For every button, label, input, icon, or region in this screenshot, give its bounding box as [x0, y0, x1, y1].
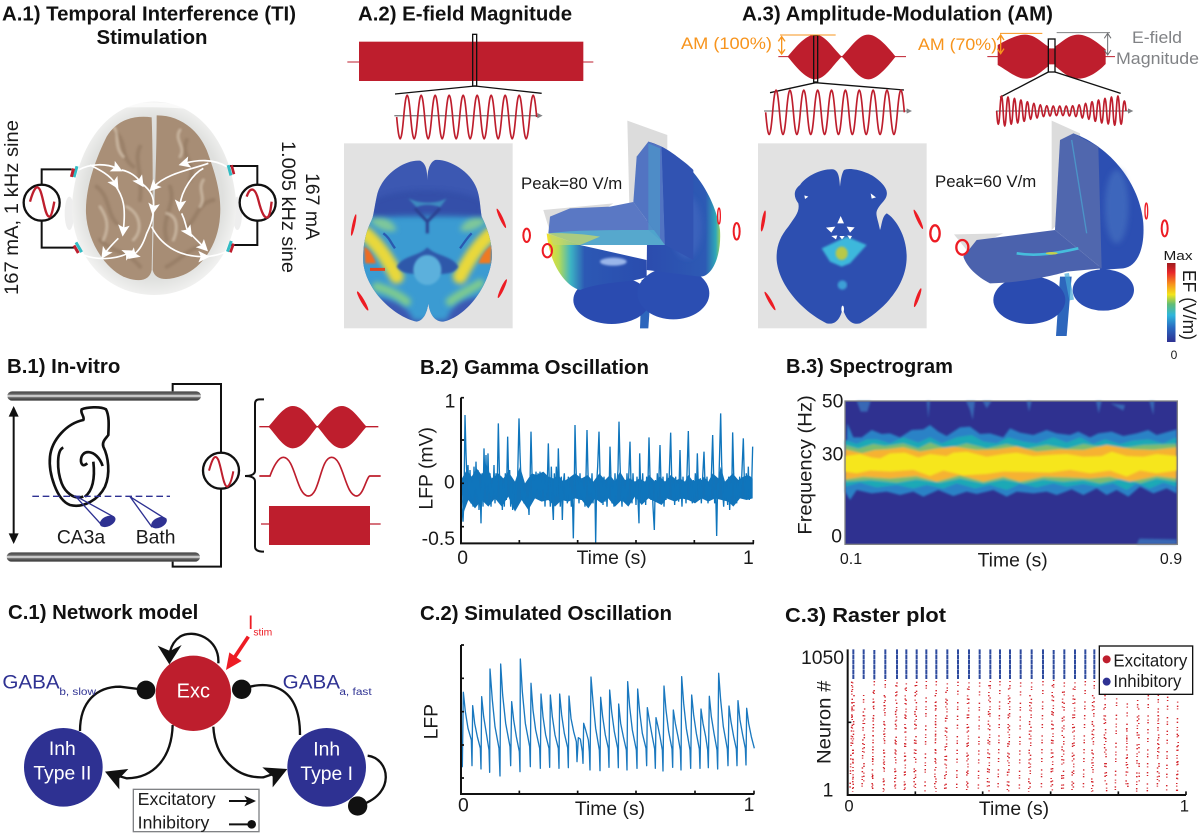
heading: A.2: A.2) E-field Magnitude: [358, 4, 572, 26]
colorbar: 0: [1171, 348, 1178, 362]
axis labels B.3: [796, 391, 1182, 572]
legend: connection types: Inhibitory: [138, 812, 210, 832]
label: I stim: [248, 613, 272, 639]
axis labels B.3: 0.1: [840, 551, 862, 568]
label: GABA a fast: [283, 672, 372, 698]
chart: measured LFP trace: [417, 391, 754, 569]
label: AM 100 percent: AM (100%): [681, 34, 772, 53]
heading: A.3: A.3) Amplitude-Modulation (AM): [742, 4, 1053, 26]
colorbar: [1164, 248, 1199, 362]
label: AM 70 percent: AM (70%): [918, 35, 997, 54]
node: Inh Type II: [24, 728, 103, 807]
labels: CA3a and Bath: Bath: [136, 527, 176, 548]
axis labels C.3: Neuron #: [815, 680, 836, 764]
heading: A.1: Stimulation: [96, 27, 208, 49]
slice: E-field axial map 100 percent carrier: [344, 143, 513, 328]
waveform: AM 100 percent: [764, 35, 912, 135]
3D brain E-field map A.2: [523, 121, 740, 328]
panel: A.1 temporal interference stimulation: [1, 4, 323, 295]
axis labels B.3: Frequency (Hz): [796, 395, 817, 535]
hippocampal slice: [50, 407, 109, 506]
head and brain illustration: [65, 102, 242, 295]
node: Inh Type I: Inh: [313, 740, 340, 761]
label: I stim: I: [248, 613, 253, 634]
panel: B.2 gamma oscillation: [417, 357, 754, 569]
legend: neuron types: Excitatory: [1113, 651, 1188, 671]
axis labels B.3: 0.9: [1160, 551, 1182, 568]
heading: C.2: C.2) Simulated Oscillation: [420, 603, 672, 625]
panel: A.3 amplitude modulation: [681, 4, 1199, 362]
legend: neuron types: [1099, 646, 1193, 694]
chart: raster of spikes: [801, 646, 1193, 820]
node: Inh Type II: Type II: [33, 763, 91, 784]
axis labels B.3: Time (s): [978, 551, 1048, 572]
label: E-field magnitude: E-field: [1132, 28, 1182, 47]
node: Inh Type II: Inh: [49, 739, 76, 760]
axis labels B.2: -0.5: [422, 529, 455, 550]
axis labels C.3: 1050: [801, 648, 844, 669]
label: E-field magnitude: [1116, 28, 1199, 68]
axis labels C.2: [422, 704, 754, 820]
heading: C.1: C.1) Network model: [8, 602, 198, 624]
panel: B.3 spectrogram: [786, 356, 1182, 572]
label: right source: [277, 141, 323, 273]
network diagram: [2, 613, 386, 832]
in-vitro setup diagram: [7, 384, 221, 567]
heading: A.1: [2, 4, 296, 49]
heading: B.2: B.2) Gamma Oscillation: [420, 357, 649, 379]
panel: A.2 e-field magnitude: [344, 4, 740, 328]
circuit right: 1.005 kHz source: [226, 165, 276, 253]
axis labels C.2: 1: [744, 795, 754, 816]
axis labels C.3: 1: [1180, 797, 1189, 816]
panel: B.1 in-vitro: [7, 356, 381, 567]
legend: connection types: [133, 789, 259, 832]
chart: simulated LFP trace: [422, 645, 754, 820]
chart: spectrogram heatmap: [796, 391, 1182, 572]
legend: neuron types: Inhibitory: [1113, 671, 1182, 691]
node: Exc: [156, 656, 231, 731]
colorbar: Max: [1164, 248, 1193, 263]
arrow: stimulation current: [226, 637, 248, 670]
axis labels B.2: 0: [457, 548, 468, 569]
axis labels B.2: 0: [444, 472, 455, 493]
label: right source: 1.005 kHz sine: [277, 141, 299, 273]
circuit left: 1 kHz source: [24, 166, 83, 254]
peak label A.2: Peak=80 V/m: [521, 174, 622, 193]
axis labels B.2: 1: [743, 548, 754, 569]
heading: A.1: A.1) Temporal Interference (TI): [2, 4, 296, 26]
label: GABA b slow: b, slow: [59, 687, 97, 698]
legend: connection types: Excitatory: [138, 789, 216, 809]
label: right source: 167 mA: [301, 173, 323, 241]
labels: CA3a and Bath: [57, 527, 176, 548]
slice: E-field axial map AM: [758, 143, 927, 328]
panel: C.3 raster plot: [785, 605, 1193, 820]
axis labels C.2: LFP: [422, 704, 443, 739]
stimulation source and waveforms: [203, 399, 381, 552]
axis labels B.2: 1: [445, 391, 455, 412]
node: Inh Type I: Type I: [300, 764, 353, 785]
axis labels B.2: Time (s): [577, 548, 647, 569]
axis labels B.2: [417, 391, 754, 569]
node: Exc: Exc: [177, 680, 210, 702]
waveform: AM 70 percent: [987, 33, 1133, 126]
axis labels B.3: 0: [831, 527, 842, 548]
panel: C.1 network model: [2, 602, 386, 832]
heading: B.1: B.1) In-vitro: [7, 356, 120, 378]
peak label A.3: Peak=60 V/m: [935, 172, 1036, 191]
label: I stim: stim: [253, 628, 272, 639]
label: E-field magnitude: Magnitude: [1116, 49, 1199, 68]
node: Inh Type I: [287, 728, 366, 807]
axis labels C.2: 0: [458, 796, 469, 817]
label: GABA b slow: GABA: [2, 672, 60, 693]
waveform: unmodulated carrier with zoom inset: [347, 34, 593, 139]
axis labels C.3: [801, 648, 1189, 820]
white field arrows: [78, 161, 230, 259]
label: GABA b slow: [2, 672, 97, 698]
3D brain E-field map A.3: [930, 121, 1168, 336]
axis labels C.3: 1: [823, 781, 833, 802]
labels: CA3a and Bath: CA3a: [57, 527, 105, 548]
axis labels C.3: Time (s): [979, 799, 1049, 820]
label: left source: 167 mA, 1 kHz sine: [1, 120, 23, 295]
label: GABA a fast: a, fast: [339, 687, 372, 698]
axis labels B.3: 50: [822, 391, 843, 412]
axis labels C.3: 0: [844, 797, 854, 816]
heading: B.3: B.3) Spectrogram: [786, 356, 953, 378]
axis labels B.2: LFP (mV): [417, 427, 438, 510]
label: GABA a fast: GABA: [283, 672, 340, 693]
heading: C.3: C.3) Raster plot: [785, 605, 946, 627]
axis labels B.3: 30: [822, 444, 843, 465]
axis labels C.2: Time (s): [575, 799, 645, 820]
colorbar: EF (V/m): [1179, 270, 1199, 340]
panel: C.2 simulated oscillation: [420, 603, 754, 820]
